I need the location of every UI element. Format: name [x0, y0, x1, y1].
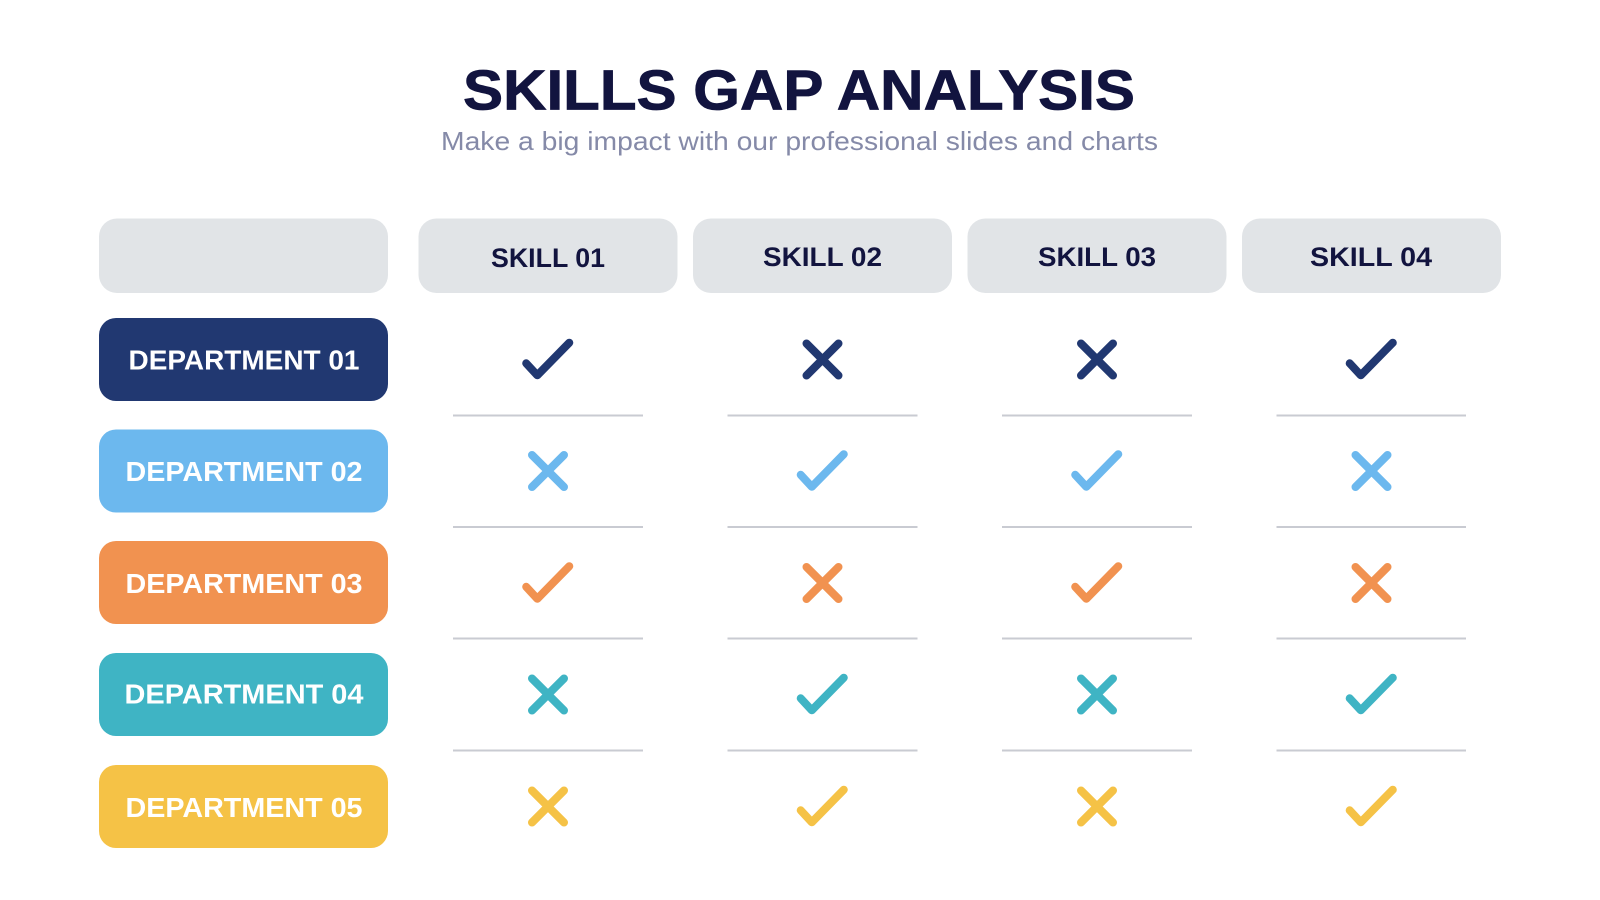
marks: cross, check, check, cross	[532, 454, 1388, 487]
row: department 02	[99, 430, 1388, 512]
label: department 02: DEPARTMENT 02	[126, 456, 362, 487]
label: department 04: DEPARTMENT 04	[124, 678, 364, 710]
header: skill 01	[418, 218, 678, 293]
label: department 05: DEPARTMENT 05	[126, 792, 362, 823]
subtitle: Make a big impact with our professional slides and charts	[441, 126, 1158, 156]
label: department 03: DEPARTMENT 03	[126, 568, 362, 599]
header: skill 04: SKILL 04	[1310, 242, 1432, 272]
row: department 01	[99, 318, 1393, 401]
header: skill 01: SKILL 01	[491, 243, 605, 273]
header: skill 02	[693, 218, 952, 293]
empty header cell	[99, 218, 388, 293]
label: department 03	[99, 541, 388, 624]
label: department 01: DEPARTMENT 01	[128, 344, 360, 376]
marks: check, cross, check, cross	[526, 566, 1388, 599]
header: skill 04	[1242, 218, 1501, 293]
label: department 02	[99, 430, 388, 512]
label: department 05	[99, 765, 388, 848]
marks: check, cross, cross, check	[526, 343, 1393, 376]
marks: cross, check, cross, check	[532, 678, 1393, 710]
row: department 04	[99, 653, 1393, 736]
label: department 04	[99, 653, 388, 736]
header: skill 02: SKILL 02	[763, 242, 882, 272]
header: skill 03	[968, 218, 1226, 293]
header row	[99, 218, 1501, 293]
row: department 05	[99, 765, 1393, 848]
label: department 01	[99, 318, 388, 401]
marks: cross, check, cross, check	[532, 790, 1393, 822]
row: department 03	[99, 541, 1388, 624]
header: skill 03: SKILL 03	[1038, 242, 1156, 272]
title: SKILLS GAP ANALYSIS	[463, 58, 1135, 122]
